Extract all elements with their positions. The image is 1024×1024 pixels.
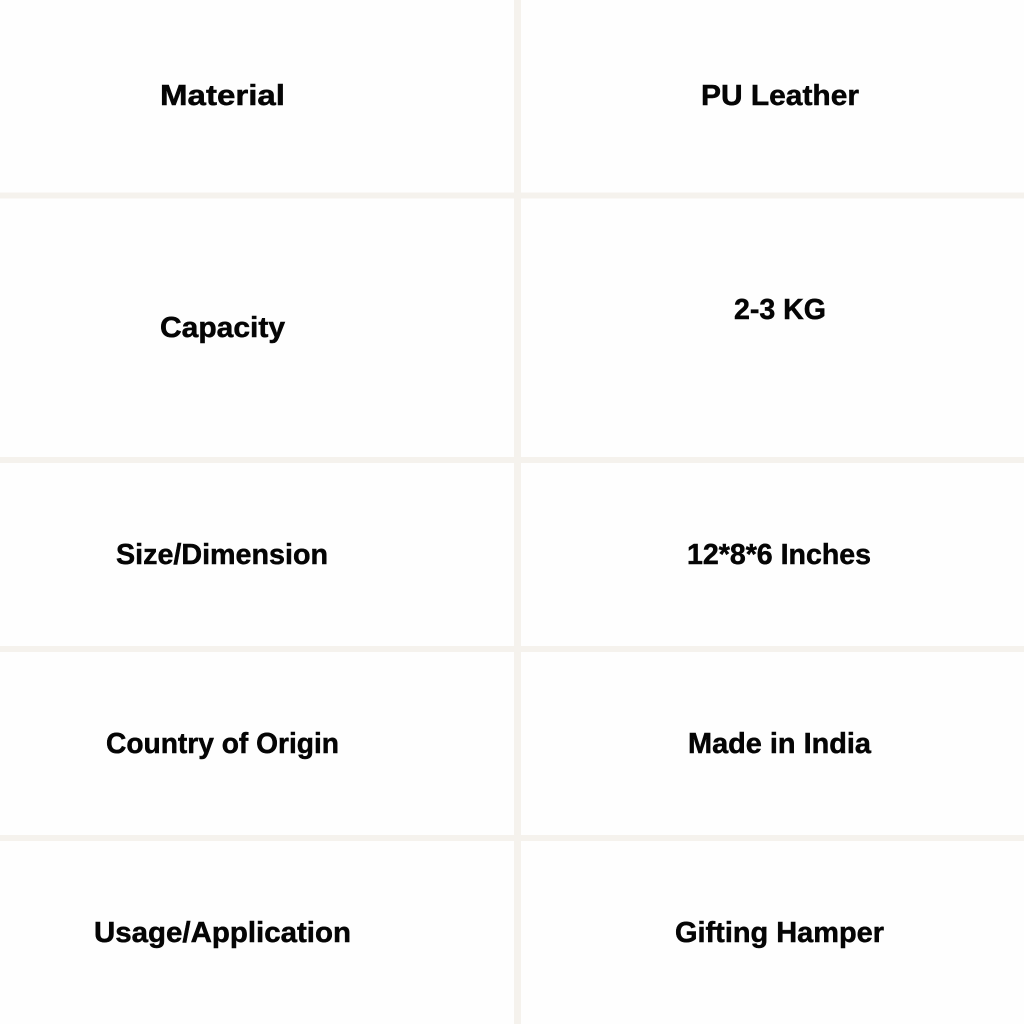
label: capacity: Capacity: [160, 312, 285, 344]
label: usage/application: Usage/Application: [94, 917, 351, 949]
row: material: [160, 80, 859, 112]
row: capacity: [160, 294, 826, 344]
value: 2-3 KG: 2-3 KG: [734, 294, 826, 326]
label: country of origin: Country of Origin: [106, 728, 339, 760]
row: size/dimension: [116, 539, 871, 571]
label: material: Material: [160, 80, 285, 112]
value: made in India: Made in India: [688, 728, 872, 760]
row: country of origin: [106, 728, 872, 760]
label: size/dimension: Size/Dimension: [116, 539, 328, 571]
row: usage/application: [94, 917, 884, 949]
value: 12*8*6 inches: 12*8*6 Inches: [687, 539, 871, 571]
value: gifting hamper: Gifting Hamper: [675, 917, 884, 949]
value: PU leather: PU Leather: [701, 80, 859, 112]
